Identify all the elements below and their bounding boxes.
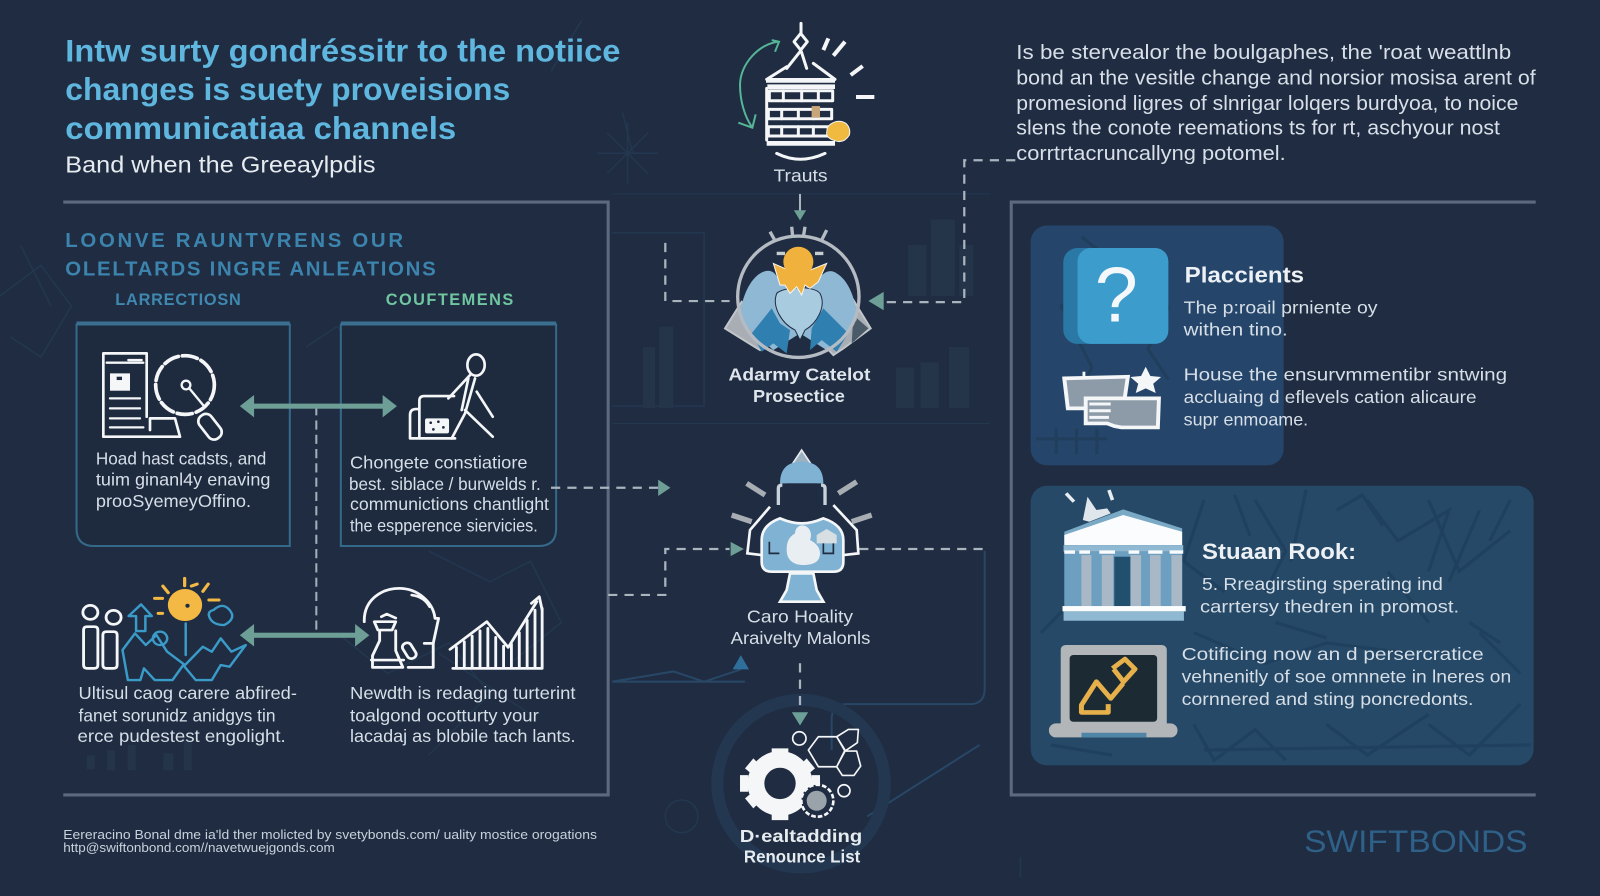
column heading right: COUFTEMENS [386, 291, 513, 309]
text: carrtersy thedren in promost. [1200, 596, 1459, 616]
arrow: from right panel [868, 292, 884, 310]
icon: temple [1062, 490, 1186, 621]
text [1182, 297, 1378, 340]
text [1182, 644, 1511, 709]
card text [96, 448, 270, 511]
title [65, 32, 620, 146]
card text: prooSyemeyOffino. [96, 491, 251, 511]
text: The p:roail prniente oy [1184, 297, 1378, 317]
section heading: LOONVE RAUNTVRENS OUR [65, 230, 403, 252]
arrow: into gear node [792, 712, 808, 726]
text: lower right: lacadaj as blobile tach lants. [350, 726, 576, 746]
card: right top [341, 324, 556, 546]
label: Caro Hoality Araivelty Malonls: Caro Hoality [747, 606, 853, 626]
text: lower left: fanet sorunidz anidgys tin [79, 705, 276, 725]
label: Caro Hoality Araivelty Malonls: Araivelty Malonls [731, 628, 871, 648]
logo: SWIFTBONDS: SWIFTBONDS [1304, 823, 1528, 859]
text [1200, 574, 1459, 616]
icon: question mark tile: ? [1095, 252, 1138, 338]
arrow: top double arrow [240, 395, 397, 417]
text: supr enmoame. [1184, 410, 1308, 430]
icon: people, sun and arrows [83, 578, 246, 680]
column heading left: LARRECTIOSN [115, 291, 241, 309]
icon: gears and hexagons [740, 729, 861, 820]
heading: Stuaan Rook: [1202, 539, 1356, 564]
intro paragraph: slens the conote reemations ts for rt, aschyour nost [1016, 118, 1500, 140]
text: lower right: toalgond ocotturty your [350, 705, 539, 725]
intro paragraph [1016, 42, 1536, 165]
icon: helmet and rising chart [364, 588, 542, 668]
footer source note: Eereracino Bonal dme ia'ld ther molicted by svetybonds.com/ uality mostice orogations [63, 827, 597, 842]
label: Adarmy Catelot Prosectice: Adarmy Catelot [729, 365, 870, 385]
text: Cotificing now an d persercratice [1182, 644, 1484, 664]
card text: Hoad hast cadsts, and [96, 448, 266, 468]
label: Adarmy Catelot Prosectice [729, 365, 870, 406]
label: Adarmy Catelot Prosectice: Prosectice [753, 386, 845, 406]
arrow: bottom double arrow [240, 624, 369, 646]
arrow: into person node [731, 542, 744, 556]
icon: document and magnifier [103, 353, 224, 442]
text [1184, 365, 1507, 430]
subtitle: Band when the Greeaylpdis [65, 151, 376, 177]
text: vehnenitly of soe omnnete in lneres on [1182, 667, 1511, 687]
card text: the espperence siervicies. [350, 516, 538, 536]
heading: Placcients [1185, 263, 1304, 288]
icon: laptop [1049, 645, 1178, 737]
title: changes is suety proveisions [65, 71, 510, 107]
card text [349, 452, 549, 536]
section heading [65, 230, 436, 281]
arrow: into first node [794, 210, 806, 220]
text: lower left: erce pudestest engolight. [78, 726, 286, 746]
label: Dealtadding Renounce List [740, 826, 862, 866]
icon: chat and star [1064, 367, 1161, 427]
icon: question mark tile [1063, 248, 1168, 344]
connector: vertical dashed link [315, 406, 317, 635]
panel: right [1011, 202, 1536, 795]
panel: left [63, 202, 608, 795]
intro paragraph: bond an the vesitle change and norsior mosisa arent of [1016, 68, 1536, 90]
connectors: dashed flow lines [551, 160, 1015, 712]
card text: Chongete constiatiore [350, 452, 528, 472]
icon: person with bag [410, 354, 493, 438]
label: Dealtadding Renounce List: D·ealtadding [740, 826, 862, 846]
card: stuaan rook [1031, 486, 1534, 765]
section heading: OLELTARDS INGRE ANLEATIONS [65, 259, 436, 281]
label: Trauts: Trauts [773, 166, 828, 186]
footer source note [63, 827, 597, 855]
arrow: to centre [658, 480, 670, 496]
card: placcients [1031, 226, 1507, 465]
text: 5. Rreagirsting sperating ind [1202, 574, 1443, 594]
intro paragraph: corrtrtacruncallyng potomel. [1016, 143, 1286, 165]
text: House the ensurvmmentibr sntwing [1184, 365, 1507, 385]
card: left top [77, 324, 290, 546]
title: Intw surty gondréssitr to the notiice [65, 32, 620, 68]
card text: tuim ginanl4y enaving [96, 470, 270, 490]
text: cornnered and sting poncredonts. [1182, 689, 1473, 709]
text: accluaing d eflevels cation alicaure [1184, 387, 1477, 407]
card text: best. siblace / burwelds r. [349, 474, 541, 494]
intro paragraph: Is be stervealor the boulgaphes, the 'roat weattlnb [1016, 42, 1511, 64]
footer source note: http@swiftonbond.com//navetwuejgonds.com [63, 840, 335, 855]
icon: building with crane [738, 23, 874, 159]
icon: person with helmet [732, 450, 872, 602]
text: lower left: Ultisul caog carere abfired- [79, 683, 297, 703]
title: communicatiaa channels [65, 110, 456, 146]
text: lower right [350, 683, 576, 746]
intro paragraph: promesiond ligres of slnrigar lolqers burdyoa, to noice [1016, 93, 1518, 115]
text: lower right: Newdth is redaging turterint [350, 683, 576, 703]
arrow: small blue up [733, 655, 749, 669]
text: lower left [78, 683, 297, 746]
label: Dealtadding Renounce List: Renounce List [744, 846, 860, 866]
card text: communictions chantlight [350, 494, 549, 514]
label: Caro Hoality Araivelty Malonls [731, 606, 871, 648]
text: withen tino. [1182, 320, 1288, 340]
icon: team in circle with sun [725, 227, 871, 357]
